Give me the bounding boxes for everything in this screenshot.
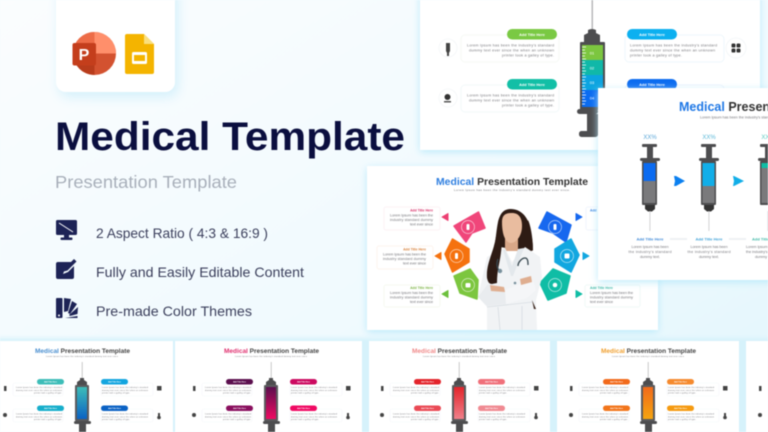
callout: green: dummy text ever since the when an unknown xyxy=(469,48,554,52)
callout: teal: Add Title Here xyxy=(519,83,545,87)
icons xyxy=(192,386,350,419)
callouts: printer took a galley of type. xyxy=(411,392,439,394)
callouts: dummy text ever since the when an unknown xyxy=(16,416,63,418)
callouts: dummy text ever since the when an unknown xyxy=(668,416,715,418)
segmented ring xyxy=(445,212,579,300)
callouts: Add Title Here xyxy=(44,380,57,384)
panel: bottom slide red xyxy=(369,341,550,432)
label 3 xyxy=(746,236,768,259)
heading: Medical Presentation Template xyxy=(35,348,130,355)
icons xyxy=(380,386,538,419)
label 1: Lorem Ipsum has been xyxy=(632,245,668,249)
syringe: 01 xyxy=(590,50,595,56)
syringe: 02 xyxy=(590,66,595,70)
callout: orange: text ever since xyxy=(403,262,426,266)
callout: orange: industry standard dummy xyxy=(383,257,426,261)
callouts: Add Title Here xyxy=(233,407,246,410)
callouts: dummy text ever since the when an unknown xyxy=(102,389,149,392)
callouts: Lorem Ipsum has been the industry's standard xyxy=(102,386,149,389)
callout: pink xyxy=(384,207,440,230)
callouts: printer took a galley of type. xyxy=(223,418,251,421)
callouts: Add Title Here xyxy=(297,380,310,384)
label 2 xyxy=(688,236,730,259)
callouts: Lorem Ipsum has been the industry's standard xyxy=(205,412,252,416)
text: aspect ratio: 2 Aspect Ratio ( 4:3 & 16:9 ) xyxy=(96,225,268,241)
callouts: printer took a galley of type. xyxy=(479,392,507,394)
callout: green: printer took a galley of type. xyxy=(502,54,554,58)
subtitle: Presentation Template xyxy=(55,172,237,192)
text: color themes: Pre-made Color Themes xyxy=(96,303,252,319)
callout: teal: Lorem Ipsum has been the xyxy=(590,291,633,295)
callouts: printer took a galley of type. xyxy=(600,418,628,421)
callouts: dummy text ever since the when an unknown xyxy=(393,416,440,418)
syringe xyxy=(451,362,468,432)
panel: bottom slide magenta: Lorem Ipsum has been the industry's standard dummy text ever since xyxy=(235,355,308,358)
label 2: the industry's standard xyxy=(688,250,730,254)
callouts: dummy text ever since the when an unknown xyxy=(102,416,149,418)
syringe 3 xyxy=(758,135,768,231)
callouts: printer took a galley of type. xyxy=(34,392,62,394)
panel: bottom slide red: Lorem Ipsum has been the industry's standard dummy text ever since xyxy=(423,355,496,358)
icon: monitor aspect ratio xyxy=(56,220,77,240)
subheading: Lorem Ipsum has been the industry's standard dummy text ever since. xyxy=(454,188,570,192)
callouts: Lorem Ipsum has been the industry's standard xyxy=(16,386,63,389)
callouts xyxy=(202,379,342,422)
callouts: printer took a galley of type. xyxy=(102,418,130,421)
heading: Medical Presentation Template xyxy=(601,348,696,355)
callouts: printer took a galley of type. xyxy=(291,418,319,421)
title: Medical Template xyxy=(55,115,405,159)
panel: bottom slide orange: Lorem Ipsum has been the industry's standard dummy text ever since xyxy=(612,355,685,358)
label 1: Add Title Here xyxy=(636,236,664,242)
callouts: dummy text ever since the when an unknown xyxy=(291,389,338,392)
callouts: dummy text ever since the when an unknown xyxy=(291,416,338,418)
callouts: printer took a galley of type. xyxy=(34,418,62,421)
callout: teal xyxy=(585,285,640,307)
callouts: Lorem Ipsum has been the industry's standard xyxy=(291,412,338,416)
callout: teal: industry standard dummy xyxy=(590,296,633,300)
callout: teal: printer took a galley of type. xyxy=(502,104,554,108)
arrows xyxy=(435,214,589,298)
callouts: Add Title Here xyxy=(44,407,57,410)
icons xyxy=(3,386,162,419)
callouts: dummy text ever since the when an unknown xyxy=(16,389,63,392)
panel: bottom slide orange xyxy=(557,341,739,432)
callouts: dummy text ever since the when an unknown xyxy=(479,416,526,418)
callout: green: text ever since xyxy=(410,300,433,304)
callout: pink: Add Title Here xyxy=(410,208,433,212)
callouts: Add Title Here xyxy=(233,380,246,384)
callout: green xyxy=(384,285,440,307)
syringe xyxy=(577,0,605,137)
syringe 1: XX% xyxy=(643,135,657,141)
callout: cyan: dummy text ever since the when an unknown xyxy=(630,48,715,52)
callouts: Lorem Ipsum has been the industry's standard xyxy=(668,412,715,416)
syringe: 03 xyxy=(590,80,595,85)
callouts: dummy text ever since the when an unknown xyxy=(582,416,629,418)
callout: blue xyxy=(625,79,724,105)
callouts: Lorem Ipsum has been the industry's standard xyxy=(479,386,526,389)
callouts xyxy=(579,379,719,422)
callouts: printer took a galley of type. xyxy=(223,392,251,394)
syringe: 04 xyxy=(590,96,595,100)
callouts: Lorem Ipsum has been the industry's standard xyxy=(291,386,338,389)
label 2: Lorem Ipsum has been xyxy=(690,245,728,249)
callout: teal: Lorem Ipsum has been the industry's standard xyxy=(467,94,554,98)
doctor photo xyxy=(478,209,542,330)
callouts: printer took a galley of type. xyxy=(102,392,130,394)
callout: green: Add Title Here xyxy=(519,33,545,37)
callouts: printer took a galley of type. xyxy=(411,418,439,421)
callout: green: Add Title Here xyxy=(410,286,433,290)
callouts: Lorem Ipsum has been the industry's standard xyxy=(102,412,149,416)
callout: green: Lorem Ipsum has been the industry's standard xyxy=(467,44,554,48)
arrow 1 xyxy=(674,176,685,186)
callouts: printer took a galley of type. xyxy=(668,418,696,421)
panel: bottom slide cut off at right xyxy=(746,341,768,432)
callouts: Add Title Here xyxy=(108,407,121,410)
label 2: Add Title Here xyxy=(695,236,723,242)
heading: Medical Presentation Template xyxy=(412,348,507,355)
callouts: Lorem Ipsum has been the industry's standard xyxy=(668,386,715,389)
callout: green xyxy=(461,29,559,62)
panel: top syringe slide xyxy=(420,0,760,150)
icon: left top xyxy=(439,39,457,57)
callout: teal: dummy text ever since the when an unknown xyxy=(469,98,554,102)
callouts: Add Title Here xyxy=(108,380,121,384)
syringe xyxy=(74,362,91,432)
callouts: Lorem Ipsum has been the industry's standard xyxy=(393,412,440,416)
callouts: Add Title Here xyxy=(421,380,434,384)
panel: bottom slide blue: Lorem Ipsum has been the industry's standard dummy text ever since xyxy=(46,355,119,358)
feature list xyxy=(56,220,304,319)
callouts: Lorem Ipsum has been the industry's standard xyxy=(582,412,629,416)
callout: green: Lorem Ipsum has been the xyxy=(390,291,433,295)
panel: right syringes slide xyxy=(598,88,768,280)
syringe xyxy=(640,362,657,432)
callouts: Add Title Here xyxy=(485,380,498,384)
callout: blue xyxy=(586,207,606,230)
icons xyxy=(569,386,728,419)
callout: orange xyxy=(377,246,433,269)
syringe 2: XX% xyxy=(702,135,716,141)
callouts: Lorem Ipsum has been the industry's standard xyxy=(582,386,629,389)
callout: green: industry standard dummy xyxy=(390,296,433,300)
callouts: Lorem Ipsum has been the industry's standard xyxy=(205,386,252,389)
callouts: Lorem Ipsum has been the industry's standard xyxy=(393,386,440,389)
callouts xyxy=(13,379,153,422)
arrow 2 xyxy=(733,176,744,186)
label 2: dummy text. xyxy=(699,255,719,259)
icon: left bottom xyxy=(439,89,457,107)
callout: cyan: Add Title Here xyxy=(639,33,665,37)
callouts: dummy text ever since the when an unknown xyxy=(393,389,440,392)
callouts: Add Title Here xyxy=(297,407,310,410)
callouts xyxy=(390,379,530,422)
icon: PowerPoint: P xyxy=(79,47,90,64)
syringe 1 xyxy=(640,135,660,231)
label 1: dummy text. xyxy=(640,255,660,259)
callouts: Add Title Here xyxy=(674,407,687,410)
callouts: dummy text ever since the when an unknown xyxy=(582,389,629,392)
label 1: the industry's standard xyxy=(628,250,672,254)
icon: edit xyxy=(56,259,76,279)
panel: bottom slide blue xyxy=(0,341,173,432)
label 1 xyxy=(628,236,672,259)
callout: cyan xyxy=(625,29,724,62)
syringe xyxy=(263,362,280,432)
callout: teal: text ever since xyxy=(590,300,613,304)
callouts: dummy text ever since the when an unknown xyxy=(479,389,526,392)
callout: blue: Add Title Here xyxy=(639,83,665,87)
icon: Google Slides xyxy=(125,34,154,74)
callout: pink: industry standard dummy xyxy=(390,218,433,222)
callout: orange: Lorem Ipsum has been the xyxy=(383,252,426,256)
callouts: dummy text ever since the when an unknown xyxy=(205,416,252,418)
callout: blue: Add xyxy=(590,208,597,212)
text: editable: Fully and Easily Editable Content xyxy=(96,264,304,280)
callout: teal xyxy=(461,79,559,112)
callout: pink: Lorem Ipsum has been the xyxy=(390,214,433,218)
callout: cyan: printer took a galley of type. xyxy=(630,54,682,58)
callouts: Add Title Here xyxy=(610,380,623,384)
callouts: dummy text ever since the when an unknown xyxy=(205,389,252,392)
icon: right top xyxy=(726,38,746,58)
callouts: Add Title Here xyxy=(485,407,498,410)
syringe 2 xyxy=(699,135,719,231)
callouts: Add Title Here xyxy=(421,407,434,410)
callouts: printer took a galley of type. xyxy=(479,418,507,421)
panel: app icons card xyxy=(56,0,175,92)
callout: orange: Add Title Here xyxy=(403,248,426,252)
callout: teal: Add Title Here xyxy=(590,286,613,290)
callouts: printer took a galley of type. xyxy=(668,392,696,394)
callouts: dummy text ever since the when an unknown xyxy=(668,389,715,392)
callouts: Add Title Here xyxy=(610,407,623,410)
panel: center slide with doctor xyxy=(367,166,658,330)
heading: Medical Presentation Template xyxy=(436,176,588,188)
callout: pink: text ever since xyxy=(410,222,433,226)
callouts: Add Title Here xyxy=(674,380,687,384)
callouts: Lorem Ipsum has been the industry's standard xyxy=(479,412,526,416)
panel: bottom slide magenta xyxy=(175,341,362,432)
heading: Medical Presentation Template xyxy=(224,348,319,355)
icon: color themes xyxy=(56,298,78,318)
callouts: printer took a galley of type. xyxy=(291,392,319,394)
callout: cyan: Lorem Ipsum has been the industry's standard xyxy=(630,44,717,48)
callouts: Lorem Ipsum has been the industry's standard xyxy=(16,412,63,416)
callouts: printer took a galley of type. xyxy=(600,392,628,394)
